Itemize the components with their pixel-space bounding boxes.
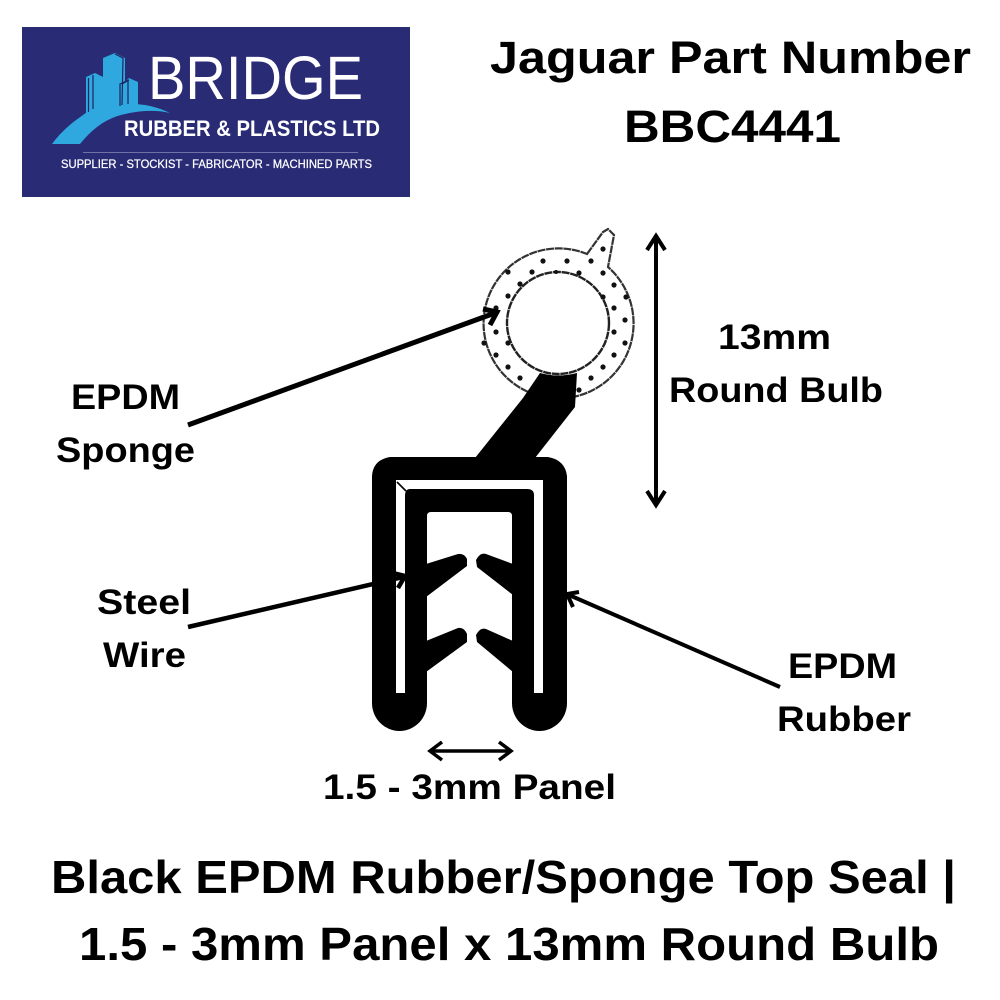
gripping fins (426, 554, 513, 672)
label: steel wire: Wire (103, 636, 186, 675)
label: EPDM sponge (56, 378, 195, 470)
footer title (51, 851, 956, 970)
arrow: to steel wire (188, 573, 405, 627)
wire corner mark (397, 482, 406, 491)
logo: Bridge Rubber & Plastics (22, 27, 410, 197)
label: 13mm round bulb (669, 318, 883, 410)
arrow: 13mm dimension (647, 236, 665, 505)
label: 13mm round bulb: 13mm (718, 318, 831, 357)
arrow: panel width dimension (430, 742, 511, 760)
title: Jaguar part number: BBC4441 (624, 101, 841, 152)
U channel body (372, 457, 567, 731)
label: steel wire (97, 583, 191, 675)
label: EPDM rubber (777, 647, 911, 739)
logo subtitle: Rubber & Plastics Ltd: RUBBER & PLASTICS LTD (124, 116, 380, 141)
title: Jaguar part number (490, 32, 971, 152)
logo tagline: SUPPLIER - STOCKIST - FABRICATOR - MACHINED PARTS (61, 157, 372, 171)
logo wordmark: BRIDGE: BRIDGE (148, 44, 363, 112)
stem joining bulb to channel (475, 373, 577, 458)
title: Jaguar part number: Jaguar Part Number (490, 32, 971, 83)
arrow: to EPDM rubber (567, 592, 780, 687)
icon: buildings on bridge arc (52, 53, 170, 144)
label: EPDM rubber: Rubber (777, 700, 911, 739)
label: panel size: 1.5 - 3mm Panel (323, 768, 616, 807)
steel wire channel (396, 480, 543, 693)
sponge bulb (481, 229, 634, 398)
footer title: Black EPDM Rubber/Sponge Top Seal | (51, 851, 956, 903)
diagram: seal cross-section (372, 229, 634, 731)
footer title: 1.5 - 3mm Panel x 13mm Round Bulb (79, 918, 939, 970)
arrow: to EPDM sponge (188, 309, 497, 425)
label: EPDM rubber: EPDM (788, 647, 897, 686)
label: 13mm round bulb: Round Bulb (669, 371, 883, 410)
label: EPDM sponge: Sponge (56, 431, 195, 470)
label: steel wire: Steel (97, 583, 191, 622)
label: EPDM sponge: EPDM (71, 378, 180, 417)
